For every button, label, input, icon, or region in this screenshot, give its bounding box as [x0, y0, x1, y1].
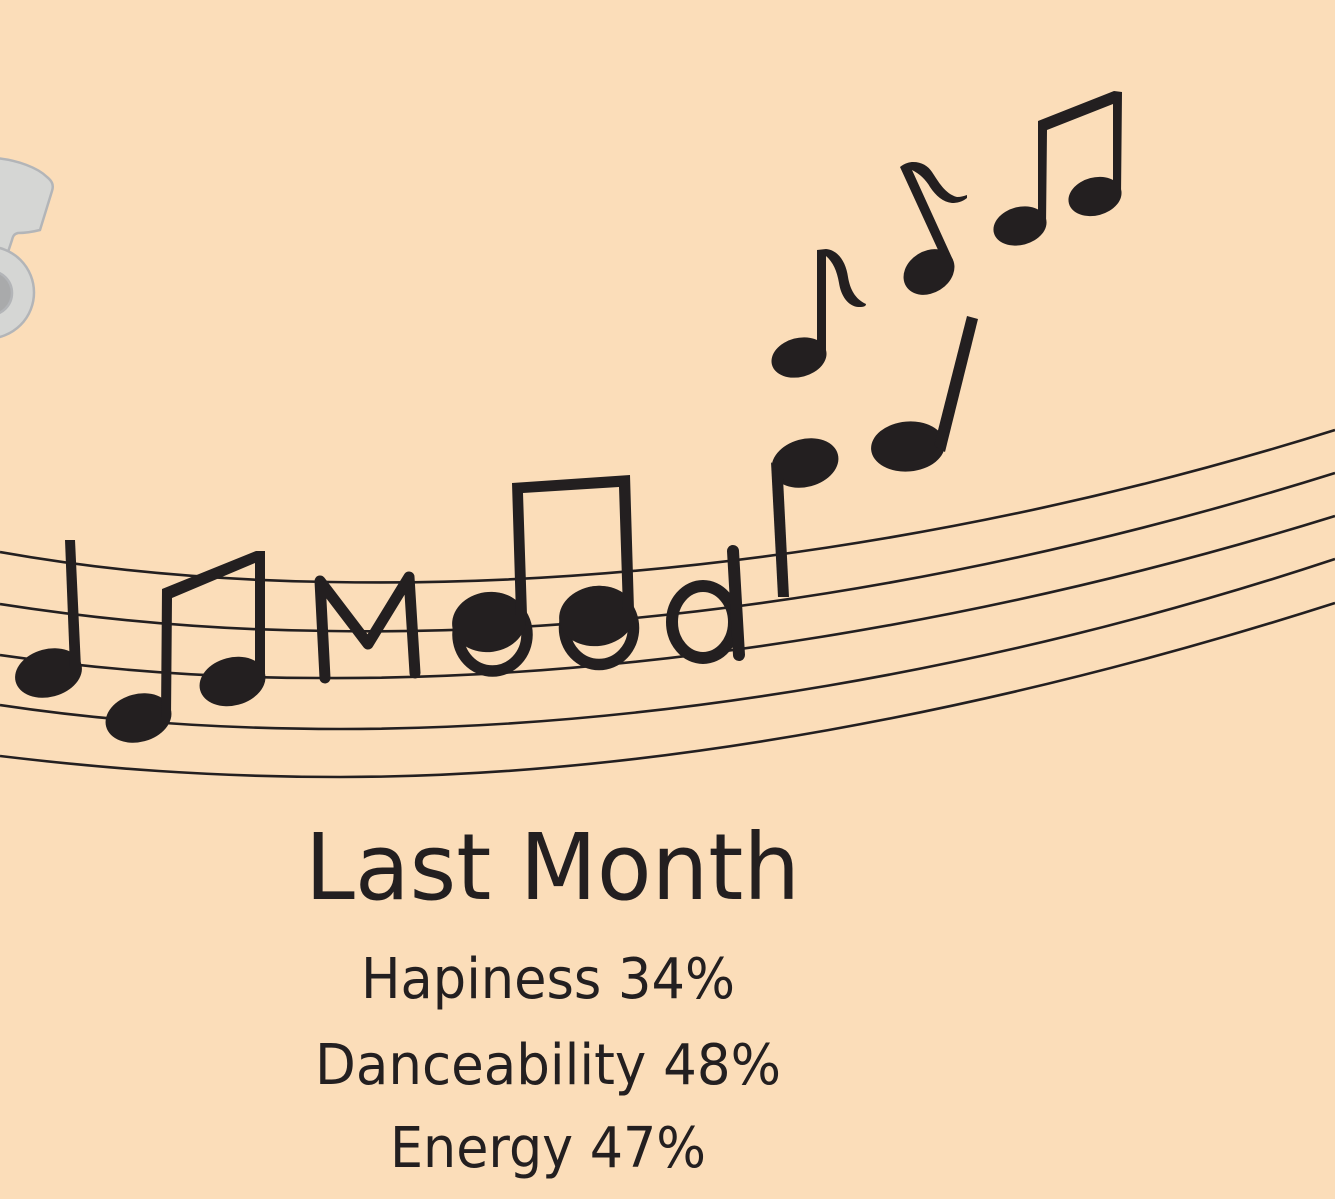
stem-down note [766, 431, 844, 597]
heading: Mood, beamed o letters [448, 475, 639, 671]
stat: danceability: Danceability 48% [315, 1033, 781, 1098]
heading: Mood, letter d [672, 551, 739, 658]
stat: happiness: Hapiness 34% [361, 947, 735, 1012]
beamed eighth notes, top right [989, 91, 1126, 251]
heading: Mood, letter M [320, 577, 415, 678]
quarter note, upper right [869, 316, 978, 475]
beamed eighth notes [100, 551, 271, 750]
eighth note [767, 249, 866, 384]
stat: energy: Energy 47% [390, 1116, 706, 1181]
title: Last Month: Last Month [305, 814, 800, 921]
music staff lines [0, 430, 1335, 777]
quarter note [9, 540, 88, 705]
eighth note, tilted [895, 162, 967, 304]
icon: guitar headstock tuner [0, 158, 53, 338]
